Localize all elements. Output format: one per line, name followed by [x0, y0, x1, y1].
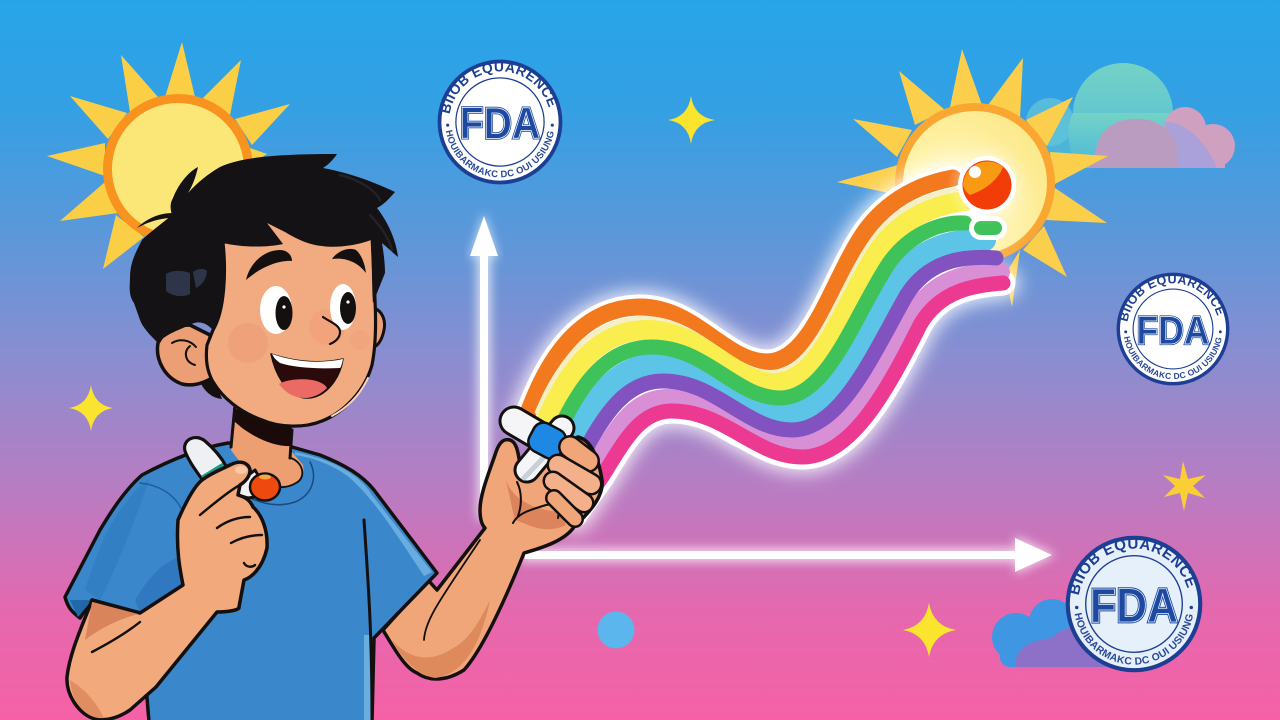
- icon: FDA seal bottom: FDA: [1090, 579, 1178, 633]
- icon: FDA seal top: [438, 60, 562, 184]
- icon: FDA seal bottom: BIIOB EQUARENCE: [1070, 540, 1194, 595]
- icon: right cloud group: [1026, 63, 1235, 168]
- rainbow band: green: [548, 223, 965, 448]
- icon: FDA seal right: FDA: [1137, 309, 1209, 353]
- chart: rainbow concentration curves: [525, 178, 1003, 515]
- icon: FDA seal top: HOUIBARMAKC DC OUI USIUNG: [446, 130, 554, 178]
- rainbow band: purple: [570, 257, 996, 475]
- icon: FDA seal bottom: FDA: [1090, 579, 1178, 633]
- right fingers: [553, 447, 591, 519]
- rainbow band: pink: [575, 283, 1003, 515]
- neck and collar: [231, 405, 314, 505]
- icon: FDA seal right: BIIOB EQUARENCE: [1120, 276, 1222, 322]
- icon: left sun: [47, 42, 290, 269]
- icon: FDA seal top: FDA: [460, 99, 540, 148]
- icon: sparkle bottom: [903, 603, 956, 657]
- green curve end dash: [981, 221, 995, 235]
- eyes: [260, 284, 356, 334]
- t-shirt: [65, 443, 437, 720]
- hair: [130, 154, 398, 343]
- eyebrows: [246, 249, 366, 280]
- icon: FDA seal bottom: HOUIBARMAKC DC OUI USIUNG: [1074, 612, 1193, 665]
- green dash halo: [981, 216, 995, 240]
- right capsule: [514, 419, 570, 478]
- icon: sparkle top: [668, 96, 715, 144]
- right ear: [372, 308, 385, 348]
- icon: FDA seal right: HOUIBARMAKC DC OUI USIUNG: [1124, 336, 1222, 380]
- neck shadow hair: [200, 378, 222, 399]
- mouth: [271, 354, 343, 398]
- right arm and palm: [383, 437, 602, 679]
- rainbow band: pale gap: [538, 190, 960, 412]
- rainbow band: blue: [560, 240, 985, 458]
- icon: right sun: [837, 49, 1108, 307]
- icon: blue dot: [598, 612, 634, 648]
- icon: FDA seal right: FDA: [1137, 309, 1209, 353]
- icon: FDA seal top: FDA: [460, 99, 540, 148]
- icon: sparkle right: [1163, 461, 1206, 511]
- rainbow band: lilac: [580, 272, 1000, 495]
- icon: FDA seal top: BIIOB EQUARENCE: [442, 63, 556, 114]
- left ear: [157, 325, 212, 385]
- icon: bottom cloud: [992, 599, 1110, 667]
- chart: y axis arrow: [470, 212, 498, 520]
- person: boy holding capsules: [65, 154, 602, 720]
- left capsule with red cap: [185, 438, 280, 500]
- nose: [323, 317, 340, 344]
- face: [206, 215, 376, 426]
- rainbow band: orange: [525, 178, 953, 420]
- icon: FDA seal bottom: [1066, 536, 1202, 672]
- left arm and fist: [67, 462, 267, 720]
- rainbow band: yellow: [538, 201, 965, 435]
- icon: sparkle left: [69, 385, 113, 431]
- chart: x axis arrow: [520, 536, 1056, 574]
- icon: red ball peak: [947, 145, 1027, 225]
- icon: FDA seal right: [1116, 272, 1230, 386]
